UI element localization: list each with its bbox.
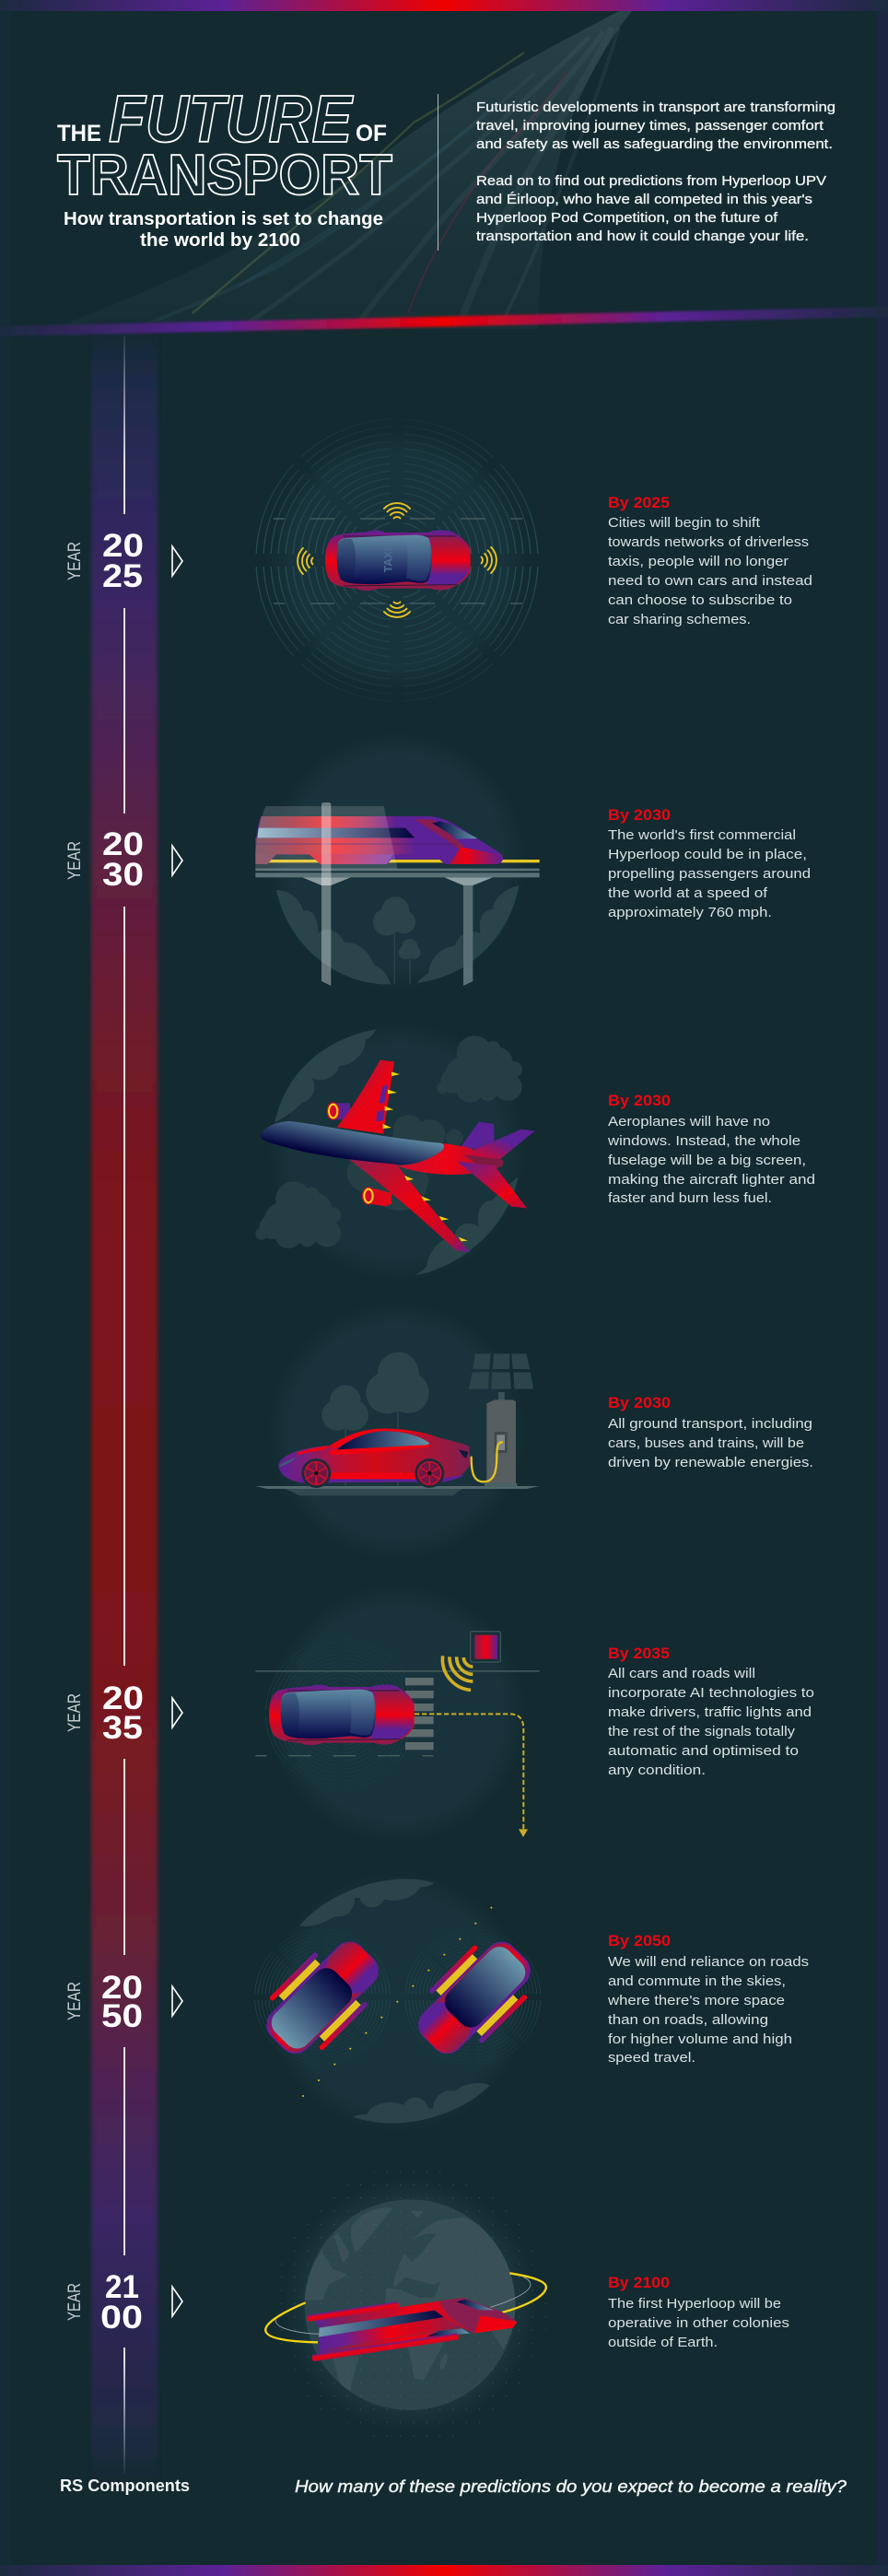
text: by 2030 hyperloop: By 2030 <box>608 806 671 824</box>
text: by 2030 hyperloop: propelling passengers around <box>608 866 811 882</box>
text: by 2025: towards networks of driverless <box>608 534 809 550</box>
year marker 2100: 21 <box>105 2269 139 2305</box>
charging cable <box>472 1442 502 1481</box>
text: by 2030 aeroplanes: fuselage will be a big screen, <box>608 1153 806 1168</box>
subtitle <box>64 209 383 251</box>
text: by 2030 ground transport: driven by renewable energies. <box>608 1455 813 1470</box>
year marker 2050: 20 <box>101 1970 143 2006</box>
illustration: driverless taxi <box>256 419 538 701</box>
title: FUTURE <box>109 83 354 157</box>
moon edges <box>299 1879 490 2124</box>
illustration: electric car charging <box>255 1301 540 1562</box>
text: by 2100: By 2100 <box>608 2274 670 2291</box>
charging station <box>485 1399 517 1487</box>
text: by 2025: can choose to subscribe to <box>608 592 792 608</box>
train <box>255 816 503 864</box>
traffic light <box>471 1632 500 1662</box>
text: by 2030 hyperloop: Hyperloop could be in place, <box>608 847 807 862</box>
car <box>269 1684 415 1745</box>
slanted gradient divider <box>0 307 888 336</box>
intro text: Futuristic developments in transport are transforming <box>476 100 835 115</box>
text: by 2100: The first Hyperloop will be <box>608 2296 781 2312</box>
text: by 2025: Cities will begin to shift <box>608 515 761 531</box>
road lines <box>255 1670 540 1756</box>
viaduct <box>255 860 540 986</box>
text: by 2100 <box>608 2274 789 2350</box>
text: by 2030 ground transport: cars, buses and trains, will be <box>608 1435 804 1451</box>
text: by 2035: any condition. <box>608 1762 706 1778</box>
year marker 2050: 50 <box>101 1998 143 2034</box>
moon edges and clouds <box>275 1029 518 1275</box>
text: by 2050 <box>607 1932 809 2066</box>
footer question: How many of these predictions do you expect to become a reality? <box>295 2477 847 2496</box>
text: by 2030 ground transport: By 2030 <box>608 1394 671 1411</box>
text: by 2050: for higher volume and high <box>608 2032 792 2047</box>
year marker 2025: 20 <box>102 528 144 564</box>
intro text: Hyperloop Pod Competition, on the future of <box>476 210 778 226</box>
text: by 2035: automatic and optimised to <box>608 1743 799 1759</box>
text: by 2025 <box>608 494 812 627</box>
year marker 2100: 00 <box>100 2300 143 2336</box>
front pier <box>321 802 331 986</box>
text: by 2025: By 2025 <box>608 494 670 511</box>
tail <box>396 1122 535 1209</box>
text: by 2050: speed travel. <box>608 2050 695 2066</box>
text: by 2035: make drivers, traffic lights and <box>608 1704 812 1720</box>
timeline centre line <box>123 336 125 2474</box>
text: by 2035: By 2035 <box>608 1645 670 1662</box>
translucent speed blur <box>255 806 398 869</box>
year marker 2100: YEAR <box>65 2283 85 2321</box>
text: by 2030 aeroplanes: Aeroplanes will have no <box>608 1114 770 1130</box>
intro text <box>476 100 835 244</box>
illustration: AI car and smart road <box>255 1583 540 1844</box>
year marker 2050 <box>65 1970 182 2034</box>
title: TRANSPORT <box>57 144 392 207</box>
intro text: Read on to find out predictions from Hyperloop UPV <box>476 173 826 189</box>
illustration: hyperloop train on viaduct <box>255 731 540 992</box>
text: by 2100: operative in other colonies <box>608 2315 789 2331</box>
sensor rings <box>265 1638 416 1789</box>
year marker 2030: 20 <box>102 826 144 862</box>
text: by 2030 hyperloop <box>608 806 811 920</box>
inland seas <box>318 2233 440 2298</box>
road dashes <box>274 519 522 603</box>
bottom wing <box>345 1157 471 1252</box>
text: by 2100: outside of Earth. <box>608 2335 718 2350</box>
taxi car <box>325 531 471 591</box>
orbit rings <box>265 2273 546 2342</box>
intro text: and safety as well as safeguarding the environment. <box>476 136 833 152</box>
year marker 2035 <box>65 1680 182 1746</box>
solar panel <box>469 1353 533 1402</box>
text: by 2030 aeroplanes: faster and burn less fuel. <box>608 1190 772 1206</box>
crossing <box>405 1678 434 1750</box>
text: by 2030 ground transport <box>608 1394 813 1470</box>
top gradient bar <box>0 0 888 11</box>
year marker 2050: YEAR <box>65 1982 85 2020</box>
trees <box>321 1352 429 1486</box>
year marker 2030: YEAR <box>65 841 85 880</box>
text: by 2035: All cars and roads will <box>608 1666 755 1681</box>
continents <box>304 2207 516 2391</box>
text: by 2030 aeroplanes: windows. Instead, the whole <box>607 1133 800 1149</box>
year marker 2030 <box>65 826 182 893</box>
header road illustration <box>147 11 632 322</box>
globe <box>305 2199 515 2410</box>
flying car left <box>251 1926 393 2068</box>
hyperloop pod <box>307 2298 518 2361</box>
title: THE <box>57 121 101 146</box>
wifi signals <box>298 503 497 617</box>
year marker 2035: YEAR <box>65 1693 85 1732</box>
illustration: earth and orbiting hyperloop <box>265 2165 553 2448</box>
fuselage <box>260 1121 444 1165</box>
year marker 2030: 30 <box>102 857 144 893</box>
text: by 2050: where there's more space <box>607 1993 785 2008</box>
year marker 2035: 20 <box>102 1680 144 1716</box>
text: by 2025: car sharing schemes. <box>608 612 751 627</box>
text: by 2035: the rest of the signals totally <box>608 1724 796 1739</box>
text: by 2050: than on roads, allowing <box>608 2012 768 2028</box>
sensor rings <box>256 419 538 701</box>
text: by 2035 <box>608 1645 814 1778</box>
footer brand: RS Components <box>60 2476 190 2495</box>
year marker 2035: 35 <box>102 1710 143 1746</box>
illustration: aeroplane <box>255 1021 535 1282</box>
subtitle: How transportation is set to change <box>64 209 383 229</box>
text: by 2050: and commute in the skies, <box>608 1973 786 1989</box>
text: by 2030 hyperloop: The world's first commercial <box>608 827 796 843</box>
sensor rings <box>255 1929 541 2065</box>
landscape silhouette <box>276 885 519 984</box>
ground <box>255 1486 540 1495</box>
year marker 2025: 25 <box>102 558 143 594</box>
intro text: transportation and how it could change your life. <box>476 228 809 244</box>
year marker 2025: YEAR <box>65 542 85 580</box>
bottom gradient bar <box>0 2565 888 2576</box>
title: OF <box>356 121 387 146</box>
text: by 2030 ground transport: All ground transport, including <box>608 1416 812 1432</box>
intro text: and Éirloop, who have all competed in this year's <box>476 192 812 207</box>
intro text: travel, improving journey times, passenger comfort <box>476 118 824 134</box>
far engine <box>327 1102 350 1120</box>
text: by 2030 hyperloop: approximately 760 mph. <box>608 905 772 920</box>
subtitle: the world by 2100 <box>140 230 300 251</box>
text: by 2030 hyperloop: the world at a speed of <box>608 885 768 901</box>
text: by 2025: taxis, people will no longer <box>608 554 789 569</box>
text: by 2035: incorporate AI technologies to <box>608 1685 814 1701</box>
text: by 2030 aeroplanes: making the aircraft lighter and <box>608 1172 815 1188</box>
year marker 2100 <box>65 2269 182 2336</box>
text: by 2050: By 2050 <box>608 1932 671 1950</box>
route arrow <box>415 1714 528 1837</box>
dot grid <box>281 2171 546 2436</box>
near engine <box>362 1187 391 1206</box>
electric car <box>278 1429 471 1488</box>
taxi car: TAXI <box>381 548 394 572</box>
illustration: flying cars <box>251 1871 545 2134</box>
year marker 2025 <box>65 528 182 594</box>
text: by 2030 aeroplanes: By 2030 <box>608 1092 671 1109</box>
top wing <box>337 1060 400 1134</box>
text: by 2050: We will end reliance on roads <box>608 1954 809 1970</box>
text: by 2025: need to own cars and instead <box>608 573 812 589</box>
signal waves <box>442 1656 473 1690</box>
timeline band <box>91 322 158 2488</box>
flying car right <box>403 1926 545 2069</box>
stars <box>302 1907 492 2097</box>
text: by 2030 aeroplanes <box>607 1092 815 1206</box>
title <box>57 83 392 207</box>
